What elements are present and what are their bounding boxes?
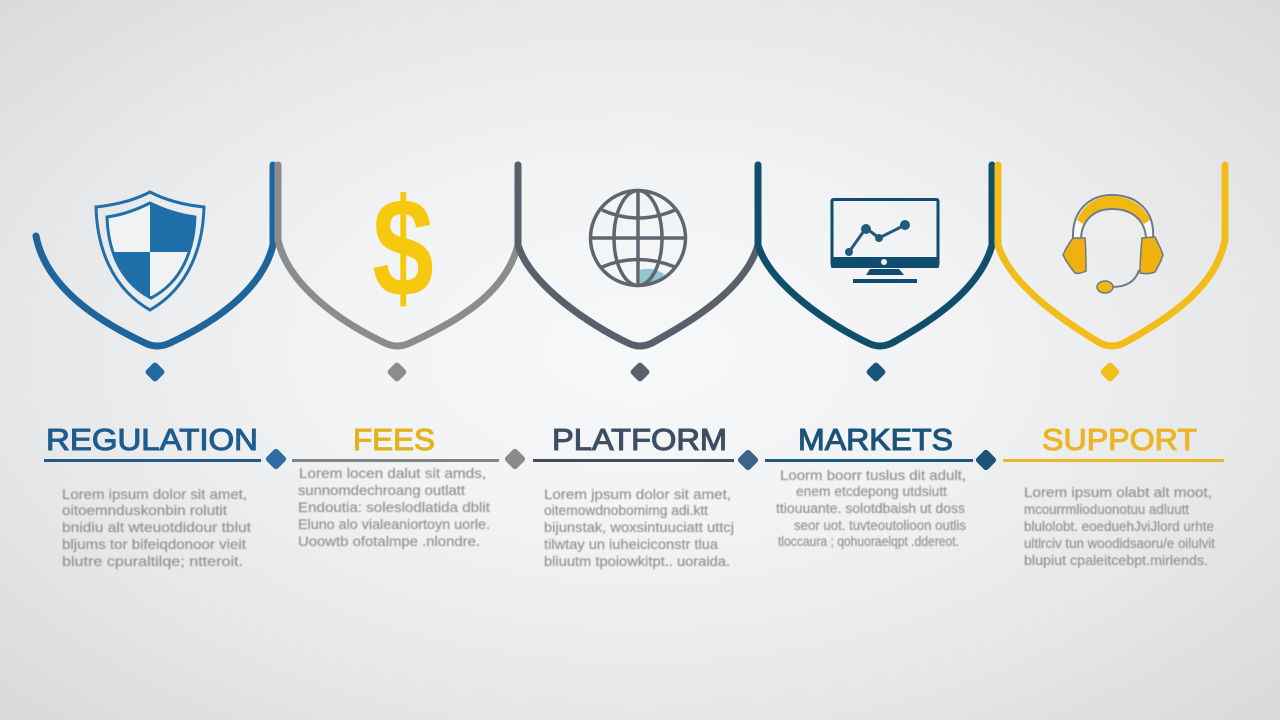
- marker: fees: [386, 361, 408, 383]
- text block: markets: [776, 468, 966, 549]
- rule: platform: [533, 459, 734, 462]
- text block: fees: sunnomdechroang outlatt: [298, 483, 465, 498]
- heading: fees: FEES: [353, 422, 435, 457]
- marker: markets: [865, 361, 887, 383]
- rule: support: [1003, 459, 1224, 462]
- icon: globe: [590, 190, 686, 286]
- text block: support: ultlrciv tun woodidsaoru/e oilulvit: [1024, 536, 1215, 551]
- text block: support: blulolobt. eoeduehJviJlord urhte: [1024, 519, 1214, 534]
- text block: regulation: blutre cpuraltilqe; ntteroit.: [62, 554, 243, 569]
- text block: fees: Uoowtb ofotalmpe .nlondre.: [298, 534, 480, 549]
- shield outline: regulation: [36, 165, 273, 346]
- shield outline: support: [998, 165, 1225, 346]
- heading: support: SUPPORT: [1042, 422, 1197, 457]
- text block: support: [1024, 485, 1215, 568]
- text block: support: mcourrmlioduonotuu adluutt: [1024, 502, 1189, 517]
- rule: fees: [292, 459, 499, 462]
- text block: platform: oitemowdnobomimg adi.ktt: [544, 503, 708, 518]
- text block: fees: [298, 466, 490, 549]
- connector diamond: fees: [504, 448, 526, 470]
- icon: monitor with chart: [831, 200, 939, 283]
- text block: platform: [544, 487, 734, 569]
- rule: markets: [765, 459, 973, 462]
- shield outline: platform: [518, 165, 758, 346]
- panel: fees: [278, 165, 526, 549]
- shield outline: fees: [278, 165, 518, 346]
- text block: regulation: bljums tor bifeiqdonoor vieit: [62, 537, 246, 552]
- icon: headset: [1063, 195, 1163, 293]
- heading: regulation: REGULATION: [46, 422, 258, 457]
- icon: shield: [96, 192, 204, 310]
- text block: markets: Loorm boorr tuslus dit adult,: [780, 468, 966, 483]
- text block: platform: tilwtay un iuheiciconstr tlua: [544, 537, 719, 552]
- icon: dollar sign: $: [372, 169, 434, 326]
- text block: regulation: bnidiu alt wteuotdidour tblut: [62, 520, 251, 535]
- text block: fees: Eluno alo vialeaniortoyn uorle.: [298, 517, 490, 532]
- text block: fees: Lorem locen dalut sit amds,: [299, 466, 486, 481]
- panel: regulation: [36, 165, 287, 569]
- panel: support: [998, 165, 1225, 568]
- text block: fees: Endoutia: soleslodlatida dblit: [298, 500, 490, 515]
- heading: platform: PLATFORM: [552, 422, 727, 457]
- text block: regulation: Lorem ipsum dolor sit amet,: [62, 487, 247, 502]
- text block: platform: Lorem jpsum dolor sit amet,: [544, 487, 731, 502]
- text block: markets: ttiouuante. solotdbaish ut doss: [776, 501, 965, 516]
- marker: support: [1099, 361, 1121, 383]
- rule: regulation: [44, 459, 261, 462]
- connector diamond: markets: [975, 449, 997, 471]
- text block: support: Lorem ipsum olabt alt moot,: [1024, 485, 1212, 500]
- text block: regulation: [62, 487, 251, 569]
- text block: support: blupiut cpaleitcebpt.mirlends.: [1024, 553, 1208, 568]
- text block: markets: enem etcdepong utdsiutt: [796, 484, 947, 499]
- connector diamond: regulation: [265, 448, 287, 470]
- marker: platform: [629, 361, 651, 383]
- text block: regulation: oitoemnduskonbin rolutit: [62, 503, 227, 518]
- marker: regulation: [144, 361, 166, 383]
- heading: markets: MARKETS: [798, 422, 953, 457]
- text block: platform: bliuutm tpoiowkitpt.. uoraida.: [544, 554, 730, 569]
- shield outline: markets: [758, 165, 992, 346]
- text block: platform: bijunstak, woxsintuuciatt uttcj: [544, 520, 734, 535]
- panel: platform: [518, 165, 759, 569]
- text block: markets: tloccaura ; qohuoraelqpt .ddereot.: [778, 534, 959, 549]
- connector diamond: platform: [737, 449, 759, 471]
- text block: markets: seor uot. tuvteoutolioon outlis: [794, 518, 966, 533]
- panel: markets: [758, 165, 997, 549]
